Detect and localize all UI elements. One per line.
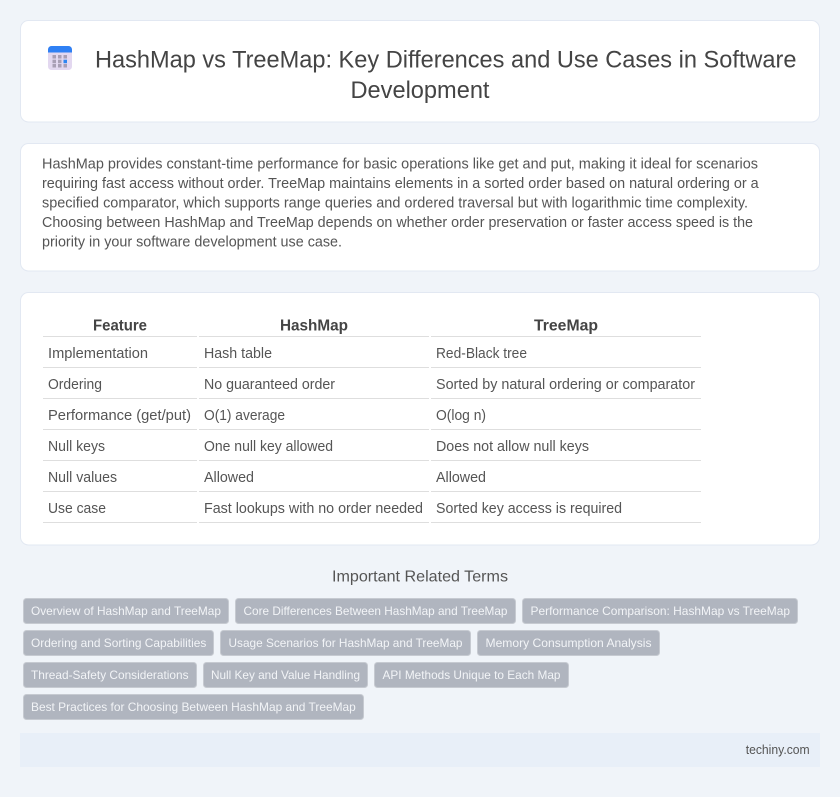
table row: null keys: Does not allow null keys [436, 439, 589, 455]
table row: use case: Use case [48, 501, 106, 517]
title [95, 46, 796, 104]
table row: null keys: One null key allowed [204, 439, 333, 455]
tag row 1: Overview of HashMap and TreeMap [31, 604, 221, 618]
tag row 1: Core Differences Between HashMap and TreeMap [244, 604, 508, 618]
tag row 2: Memory Consumption Analysis [486, 636, 652, 650]
table row: performance: O(log n) [436, 408, 486, 424]
text block: introduction paragraph [42, 156, 759, 250]
table row: use case: Fast lookups with no order needed [204, 501, 423, 517]
table header row [43, 318, 701, 337]
text block: introduction paragraph: Choosing between HashMap and TreeMap depends on whether order preservation or faster access speed is the [42, 215, 753, 231]
tag row 1: Performance Comparison: HashMap vs TreeMap [530, 604, 790, 618]
tag row 4 [24, 694, 364, 720]
panel: related term tags [24, 598, 798, 720]
text block: introduction paragraph: priority in your software development use case. [42, 234, 342, 250]
table row: ordering: Ordering [48, 377, 102, 393]
title: HashMap vs TreeMap: Key Differences and Use Cases in Software [95, 46, 796, 74]
table header row: TreeMap [534, 318, 598, 335]
table header row: Feature [93, 318, 147, 335]
tag row 4: Best Practices for Choosing Between HashMap and TreeMap [31, 700, 356, 714]
table row: null values [43, 470, 701, 492]
text block: introduction paragraph: requiring fast access without order. TreeMap maintains elements in a sorted order based on natural ordering or a [42, 176, 759, 192]
table row: performance [43, 408, 701, 430]
table row: use case [43, 501, 701, 523]
table row: implementation: Implementation [48, 346, 148, 362]
table row: implementation: Hash table [204, 346, 272, 362]
tag row 3: Null Key and Value Handling [211, 668, 360, 682]
table row: performance: O(1) average [204, 408, 285, 424]
panel: comparison table [20, 292, 820, 545]
footer bar: techiny.com [746, 742, 810, 757]
table row: null keys [43, 439, 701, 461]
tag row 3: API Methods Unique to Each Map [382, 668, 561, 682]
icon: calendar grid [48, 46, 72, 70]
tag row 2 [24, 630, 660, 656]
title: Development [350, 77, 490, 104]
table row: ordering: No guaranteed order [204, 377, 335, 393]
table row: implementation [43, 346, 701, 368]
table row: implementation: Red-Black tree [436, 346, 527, 362]
heading: important related terms: Important Related Terms [332, 568, 508, 586]
tag row 2: Usage Scenarios for HashMap and TreeMap [228, 636, 463, 650]
table row: ordering: Sorted by natural ordering or comparator [436, 377, 695, 393]
table row: null keys: Null keys [48, 439, 105, 455]
table row: null values: Allowed [204, 470, 254, 486]
table row: ordering [43, 377, 701, 399]
panel: header [20, 20, 820, 122]
panel: introduction [20, 144, 820, 271]
text block: introduction paragraph: HashMap provides constant-time performance for basic operations like get and put, making it ideal for scenarios [42, 156, 758, 172]
text block: introduction paragraph: specified comparator, which supports range queries and ordered traversal but with logarithmic time complexity. [42, 195, 748, 211]
table row: use case: Sorted key access is required [436, 501, 622, 517]
table row: null values: Null values [48, 470, 117, 486]
table header row: HashMap [280, 318, 348, 335]
tag row 2: Ordering and Sorting Capabilities [31, 636, 206, 650]
tag row 3: Thread-Safety Considerations [31, 668, 188, 682]
table row: null values: Allowed [436, 470, 486, 486]
footer bar [20, 733, 820, 767]
table row: performance: Performance (get/put) [48, 408, 191, 424]
tag row 1 [24, 598, 798, 624]
tag row 3 [24, 662, 568, 688]
